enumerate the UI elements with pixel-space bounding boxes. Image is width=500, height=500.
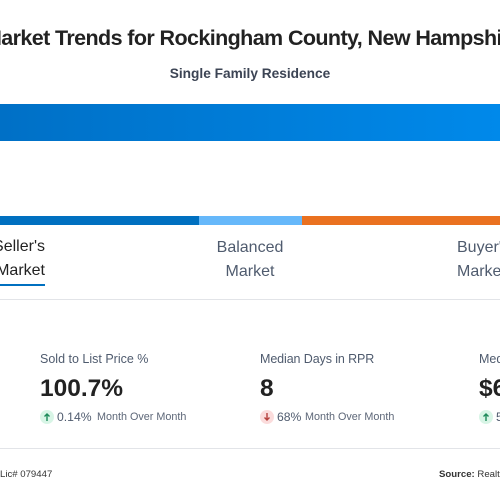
change value: 0.14% — [57, 410, 92, 424]
blue gradient banner — [0, 104, 500, 141]
buyer's market label — [457, 240, 500, 280]
balanced market label: Balanced — [217, 239, 283, 256]
change value: 68% — [277, 410, 301, 424]
seller's market label — [0, 239, 45, 286]
metric: sold to list price — [40, 352, 186, 424]
metric label: Sold to List Price % — [40, 352, 148, 366]
down arrow icon — [260, 410, 274, 424]
subtitle: Single Family Residence — [170, 66, 330, 81]
balanced market label — [217, 239, 283, 280]
change period: Month Over Month — [305, 411, 394, 423]
up arrow icon — [479, 410, 493, 424]
seller's segment — [0, 216, 199, 225]
license footer: Lic# 079447 — [0, 469, 52, 480]
buyer's segment — [302, 216, 500, 225]
metric label: Median Days in RPR — [260, 352, 374, 366]
metric: median days in RPR — [260, 352, 394, 424]
change period: Month Over Month — [97, 411, 186, 423]
market scale bar — [0, 216, 500, 225]
metric value: 8 — [260, 375, 274, 402]
balanced market label: Market — [226, 263, 274, 280]
up arrow icon — [40, 410, 54, 424]
metric value: 100.7% — [40, 375, 123, 402]
metric: median price, cropped — [479, 352, 500, 424]
balanced segment — [199, 216, 302, 225]
